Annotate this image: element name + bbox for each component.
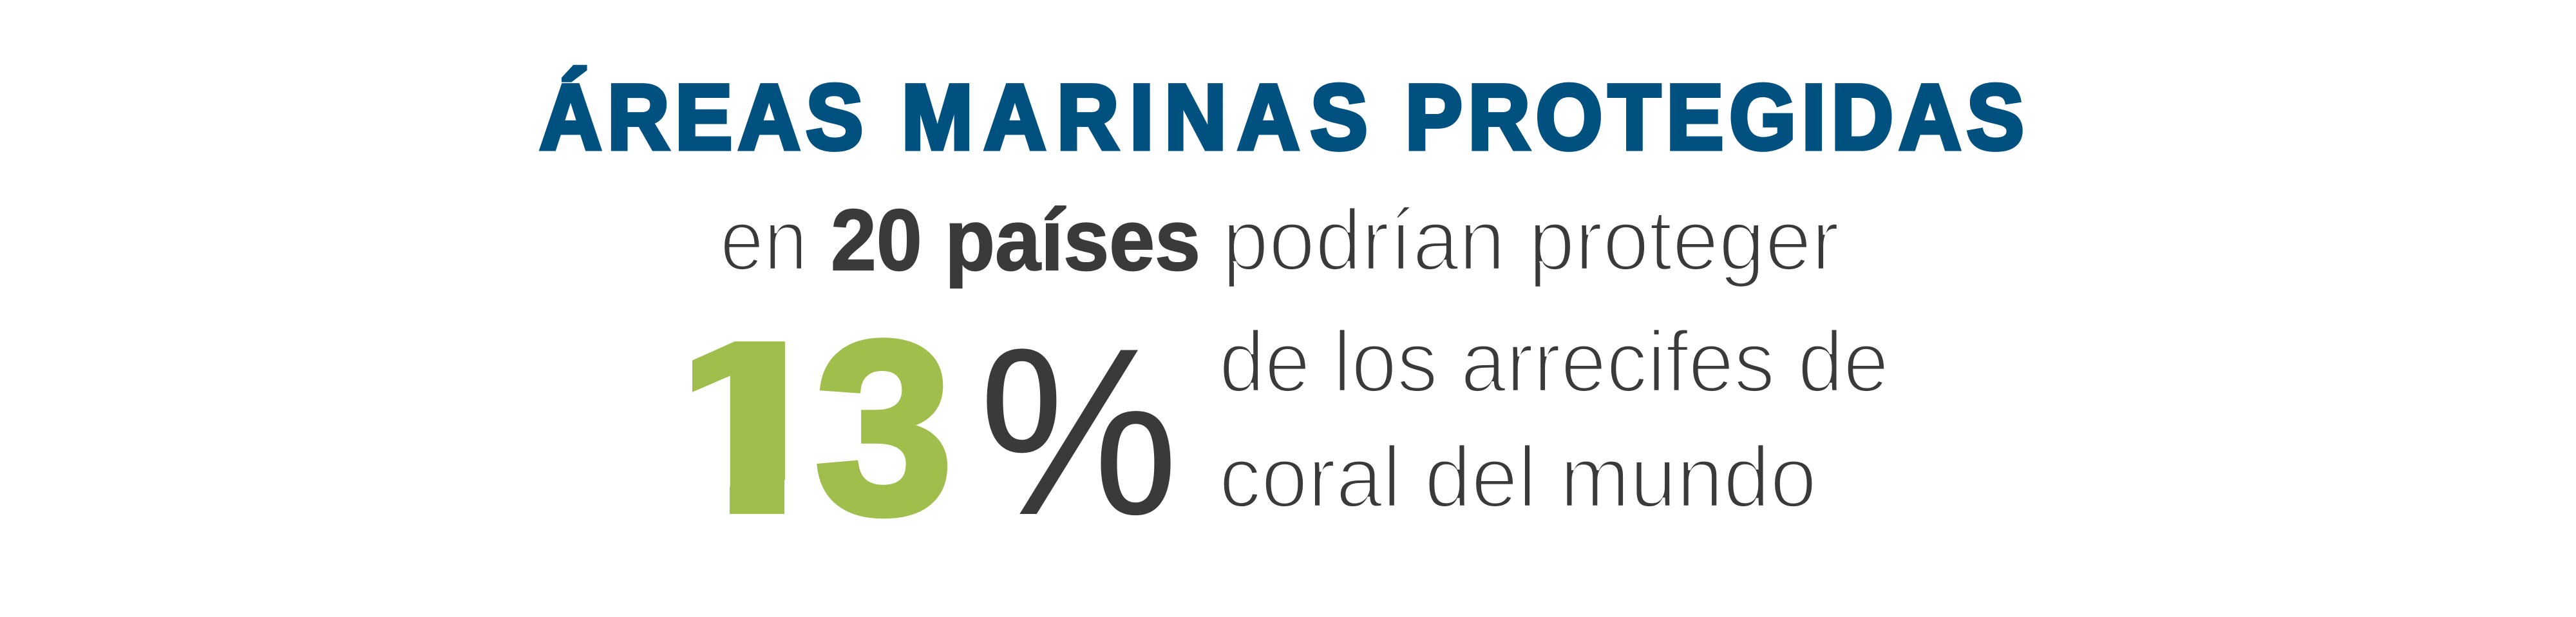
big number 13: 1 <box>649 289 849 567</box>
percent sign: % <box>979 299 1179 565</box>
subtitle line: podrían proteger <box>1222 191 1839 289</box>
subtitle line <box>720 191 1839 289</box>
description text: de los arrecifes de <box>1219 313 1889 410</box>
description text: coral del mundo <box>1219 428 1817 526</box>
title: ÁREAS <box>540 66 863 169</box>
title <box>540 66 2024 169</box>
subtitle line: 20 países <box>831 191 1200 289</box>
big number 13: 3 <box>815 290 953 565</box>
description text <box>1219 313 1889 526</box>
title: MARINAS <box>902 66 1368 169</box>
subtitle line: en <box>720 191 808 289</box>
big number 13 <box>644 289 953 567</box>
title: PROTEGIDAS <box>1405 66 2024 169</box>
